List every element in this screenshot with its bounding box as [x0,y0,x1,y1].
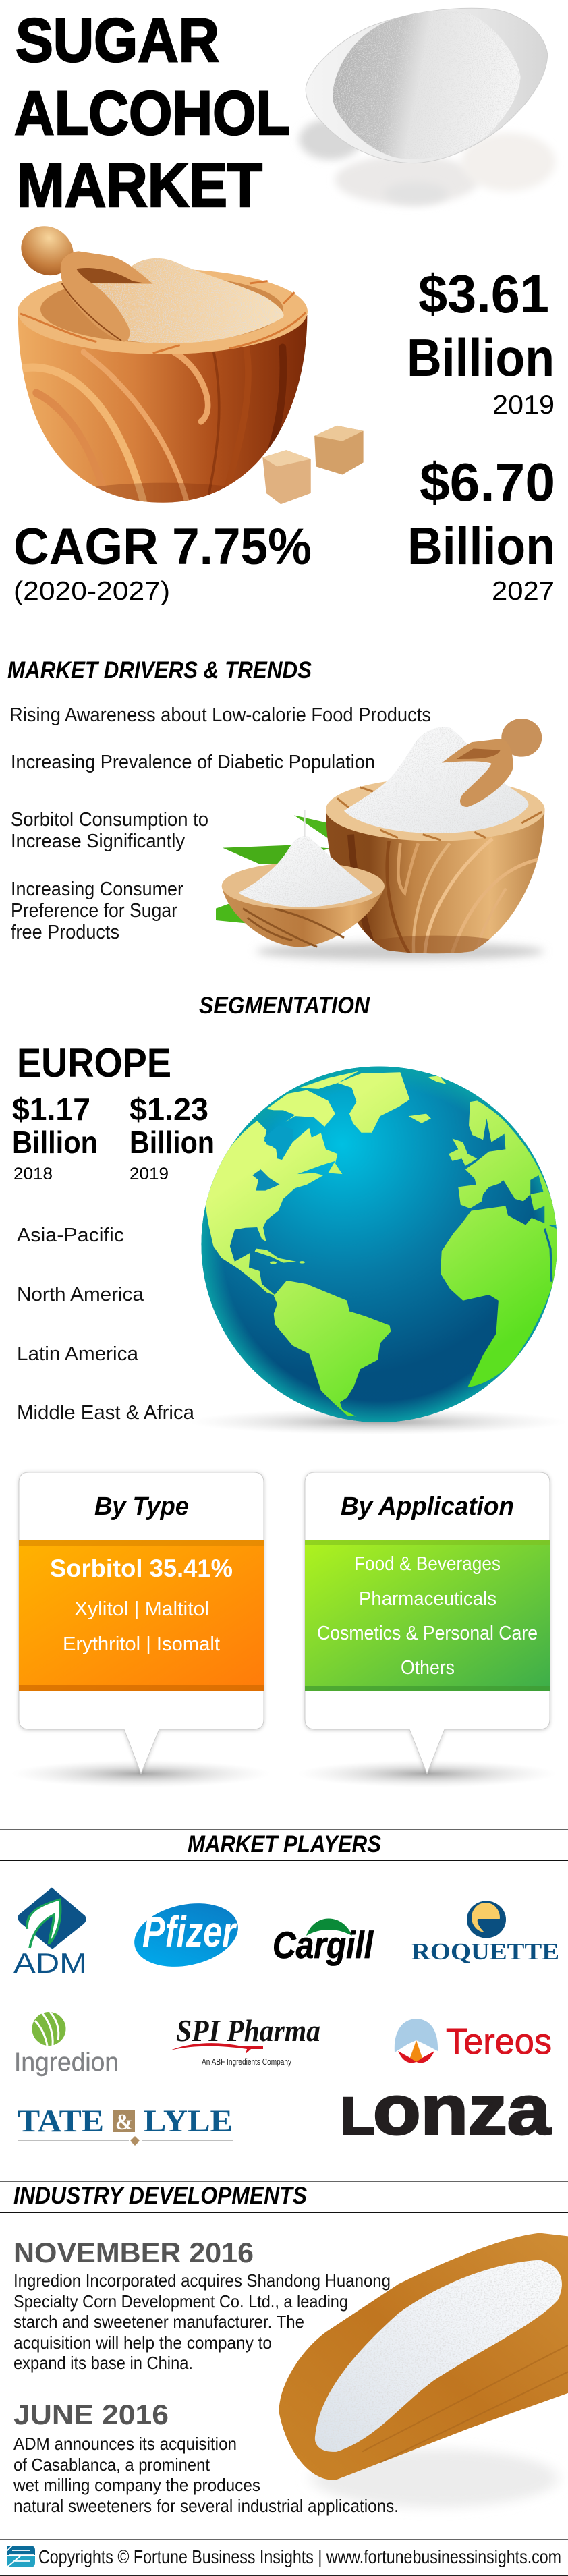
body text: Specialty Corn Development Co. Ltd., a leading [13,2291,348,2312]
band: application values: Pharmaceuticals [359,1588,496,1610]
band: application values [305,1540,550,1691]
band: type values [19,1540,264,1691]
driver 1: Rising Awareness about Low-calorie Food Products [9,704,431,726]
panel: market drivers list [9,704,431,943]
icon: Fortune Business Insights logo [7,2546,35,2567]
stat: 2027 market size: Billion [407,516,555,576]
heading: segmentation: SEGMENTATION [199,992,370,1019]
logo: Lonza: onza [373,2071,551,2150]
body text: Ingredion Incorporated acquires Shandong Huanong [13,2270,391,2291]
image: wooden bowls with white sugar [216,719,545,960]
region list [17,1225,195,1424]
logo: Roquette [411,1901,559,1965]
title: MARKET [17,151,262,220]
logo: Tereos [395,2019,552,2063]
logo: Tate & Lyle: TATE [18,2104,104,2139]
body text: natural sweeteners for several industrial applications. [13,2496,399,2516]
body text [13,2434,399,2516]
band: application values: Others [401,1657,455,1679]
stat: 2019 market size: $3.61 [418,264,549,324]
body text: acquisition will help the company to [13,2332,272,2353]
logo: Ingredion: Ingredion [14,2048,119,2077]
driver 4 [11,878,183,943]
stat: 2019 market size: 2019 [492,391,555,420]
logo: Tate & Lyle: LYLE [144,2104,233,2139]
stat: Europe 2018: Billion [12,1125,98,1160]
icon: brown sugar cubes [262,426,364,504]
region list: North America [17,1284,144,1306]
stat: Europe 2018: $1.17 [12,1092,90,1127]
heading: by type: By Type [94,1492,189,1521]
icon: globe [188,1067,567,1435]
band: application values: Cosmetics & Personal Care [317,1623,538,1644]
panel: November 2016 development [13,2237,391,2373]
logo: SPI Pharma [170,2013,320,2067]
panel: by type [11,1472,271,1787]
body text: of Casablanca, a prominent [13,2455,210,2475]
logo: Ingredion [14,2012,119,2077]
stat: 2019 market size: Billion [407,328,555,387]
logo: Tereos: Tereos [446,2021,552,2062]
body text [13,2270,391,2373]
logo: SPI Pharma: An ABF Ingredients Company [202,2056,291,2067]
driver 4: free Products [11,922,119,943]
logo: Pfizer: Pfizer [142,1907,237,1956]
region list: Middle East & Africa [17,1402,195,1424]
stat: Europe 2018 [12,1092,98,1183]
body text: ADM announces its acquisition [13,2434,237,2454]
panel: by application [297,1472,557,1787]
panel: June 2016 development [13,2399,399,2516]
body text: starch and sweetener manufacturer. The [13,2312,304,2332]
heading: market players: MARKET PLAYERS [188,1831,381,1857]
band: type values: Erythritol | Isomalt [63,1633,220,1655]
stat: Europe 2019: 2019 [130,1165,169,1183]
driver 3: Sorbitol Consumption to [11,809,208,831]
card shadow [297,1760,557,1787]
region list: Latin America [17,1343,139,1365]
logo: Pfizer [128,1895,244,1976]
stat: 2027 market size [407,452,555,606]
image: wooden scoop with sugar [279,2233,568,2507]
stat: 2027 market size: $6.70 [420,452,555,512]
heading: industry developments: INDUSTRY DEVELOPMENTS [13,2183,307,2209]
logo: Tate & Lyle [18,2104,233,2146]
panel: regional segmentation [12,1040,215,1424]
driver 2: Increasing Prevalence of Diabetic Population [11,752,375,773]
heading: market drivers and trends: MARKET DRIVERS & TRENDS [7,657,312,683]
driver 4: Increasing Consumer [11,878,183,900]
driver 3: Increase Significantly [11,831,185,852]
stat: CAGR [13,518,312,606]
card body [305,1472,550,1774]
body text: expand its base in China. [13,2353,193,2373]
stat: CAGR: CAGR 7.75% [13,518,312,576]
logo: Tate & Lyle: & [115,2110,133,2135]
stat: Europe 2019: $1.23 [130,1092,208,1127]
driver 3 [11,809,208,852]
band: type values: Sorbitol 35.41% [50,1555,233,1582]
stat: Europe 2019: Billion [130,1125,215,1160]
logo: Lonza: L [341,2086,374,2146]
heading: by application: By Application [341,1492,514,1521]
stat: 2027 market size: 2027 [492,577,555,606]
date: JUNE 2016 [13,2399,169,2430]
region list: Asia-Pacific [17,1225,124,1246]
heading: Europe: EUROPE [17,1040,171,1086]
stat: CAGR: (2020-2027) [13,577,170,606]
logo: ADM: ADM [13,1947,87,1979]
title: ALCOHOL [14,79,290,148]
logo: SPI Pharma: SPI Pharma [176,2013,320,2048]
image: white bowl of sugar [299,8,555,204]
card body [19,1472,264,1774]
band: type values: Xylitol | Maltitol [74,1598,209,1620]
band: application values: Food & Beverages [354,1553,501,1575]
logo: Cargill: Cargill [273,1924,374,1966]
title [14,6,290,220]
image: wooden bowl with brown sugar [18,226,308,503]
card shadow [11,1760,271,1787]
body text: wet milling company the produces [13,2475,260,2495]
stat: Europe 2018: 2018 [13,1165,53,1183]
date: NOVEMBER 2016 [13,2237,254,2268]
driver 4: Preference for Sugar [11,900,177,922]
stat: Europe 2019 [130,1092,215,1183]
logo: Roquette: ROQUETTE [411,1938,559,1965]
stat: 2019 market size [407,264,555,420]
logo: ADM [13,1887,87,1979]
title: SUGAR [16,6,219,75]
footer [0,2539,568,2576]
